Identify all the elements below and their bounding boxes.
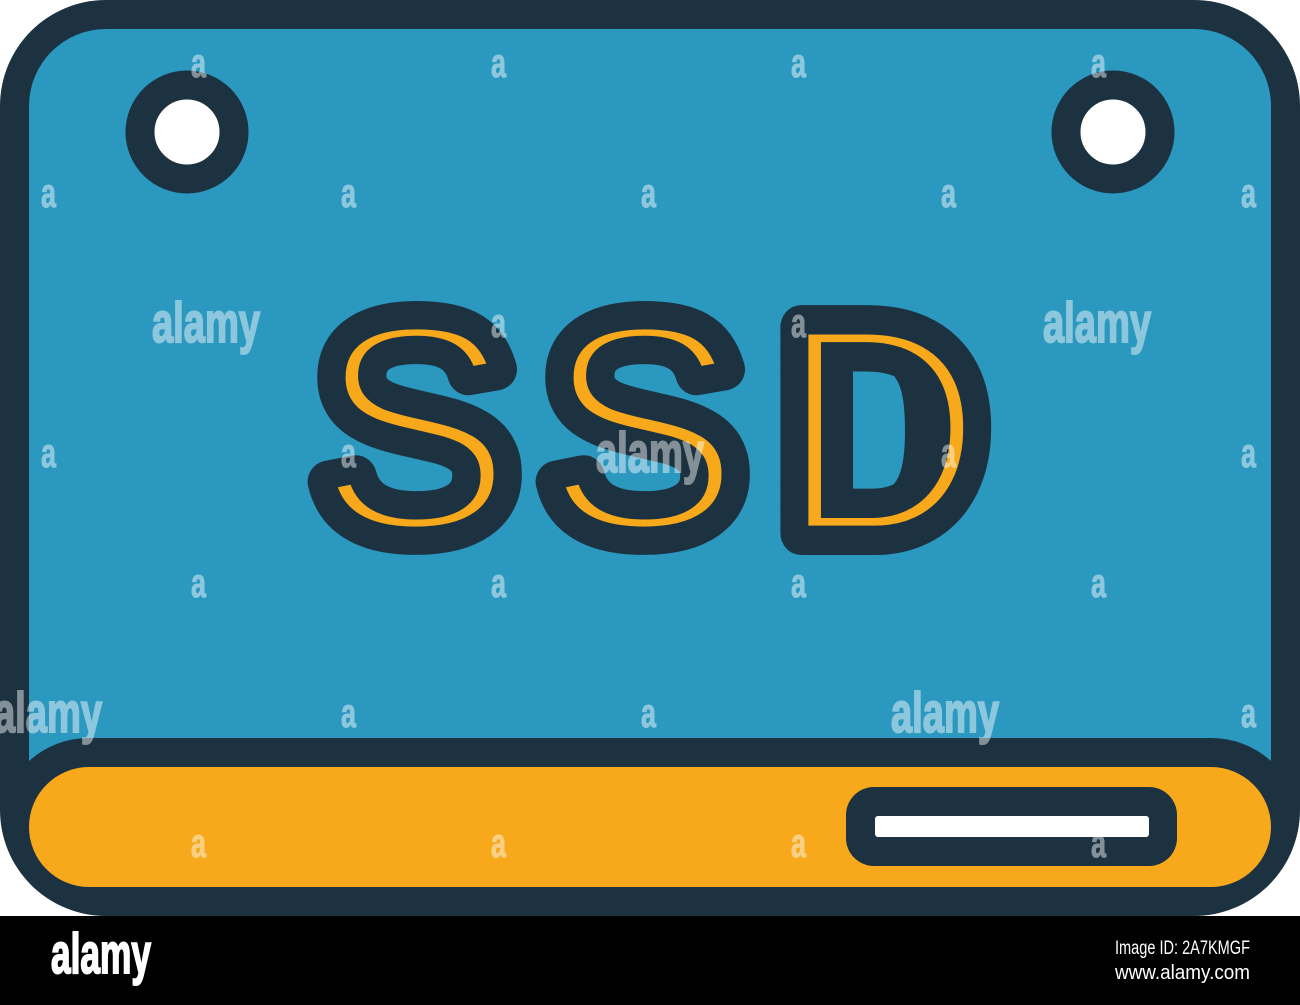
watermark pattern: a	[341, 690, 357, 736]
watermark pattern: a	[1241, 690, 1257, 736]
watermark pattern: a	[1091, 560, 1107, 606]
icon: right screw hole	[1066, 85, 1160, 179]
watermark pattern: a	[191, 40, 207, 86]
SSD label: S	[543, 261, 743, 595]
watermark pattern: a	[491, 300, 507, 346]
watermark pattern: a	[491, 560, 507, 606]
watermark pattern: a	[791, 560, 807, 606]
watermark pattern: a	[641, 690, 657, 736]
watermark pattern: alamy	[596, 421, 704, 485]
watermark pattern: a	[191, 560, 207, 606]
SSD label: S	[315, 261, 515, 595]
watermark pattern	[0, 40, 1257, 866]
watermark pattern: a	[791, 820, 807, 866]
footer logo: alamy	[51, 922, 151, 986]
blue drive face	[29, 29, 1271, 761]
SSD label	[315, 261, 984, 596]
watermark pattern: a	[341, 430, 357, 476]
watermark pattern: alamy	[1043, 291, 1151, 355]
website: www.alamy.com	[1114, 962, 1250, 984]
orange bottom strip	[29, 767, 1271, 887]
watermark pattern: a	[641, 170, 657, 216]
connector slot	[846, 787, 1177, 866]
black footer bar	[0, 916, 1300, 1005]
icon: left screw hole	[140, 85, 234, 179]
watermark pattern: a	[341, 170, 357, 216]
watermark pattern: a	[791, 40, 807, 86]
watermark pattern: a	[1091, 820, 1107, 866]
watermark pattern: a	[1241, 170, 1257, 216]
SSD label: D	[778, 262, 984, 596]
watermark pattern: a	[491, 820, 507, 866]
watermark pattern: a	[1241, 430, 1257, 476]
SSD label: S	[543, 261, 743, 595]
SSD label: S	[315, 261, 515, 595]
watermark pattern: a	[191, 820, 207, 866]
watermark pattern: a	[491, 40, 507, 86]
watermark pattern: a	[1091, 40, 1107, 86]
SSD label: D	[778, 262, 984, 596]
watermark pattern: a	[941, 430, 957, 476]
watermark pattern: a	[41, 430, 57, 476]
image id: Image ID: 2A7KMGF	[1115, 938, 1250, 959]
watermark pattern: alamy	[891, 681, 999, 745]
watermark pattern: a	[941, 170, 957, 216]
watermark pattern: a	[791, 300, 807, 346]
watermark pattern: alamy	[152, 291, 260, 355]
watermark pattern: a	[41, 170, 57, 216]
